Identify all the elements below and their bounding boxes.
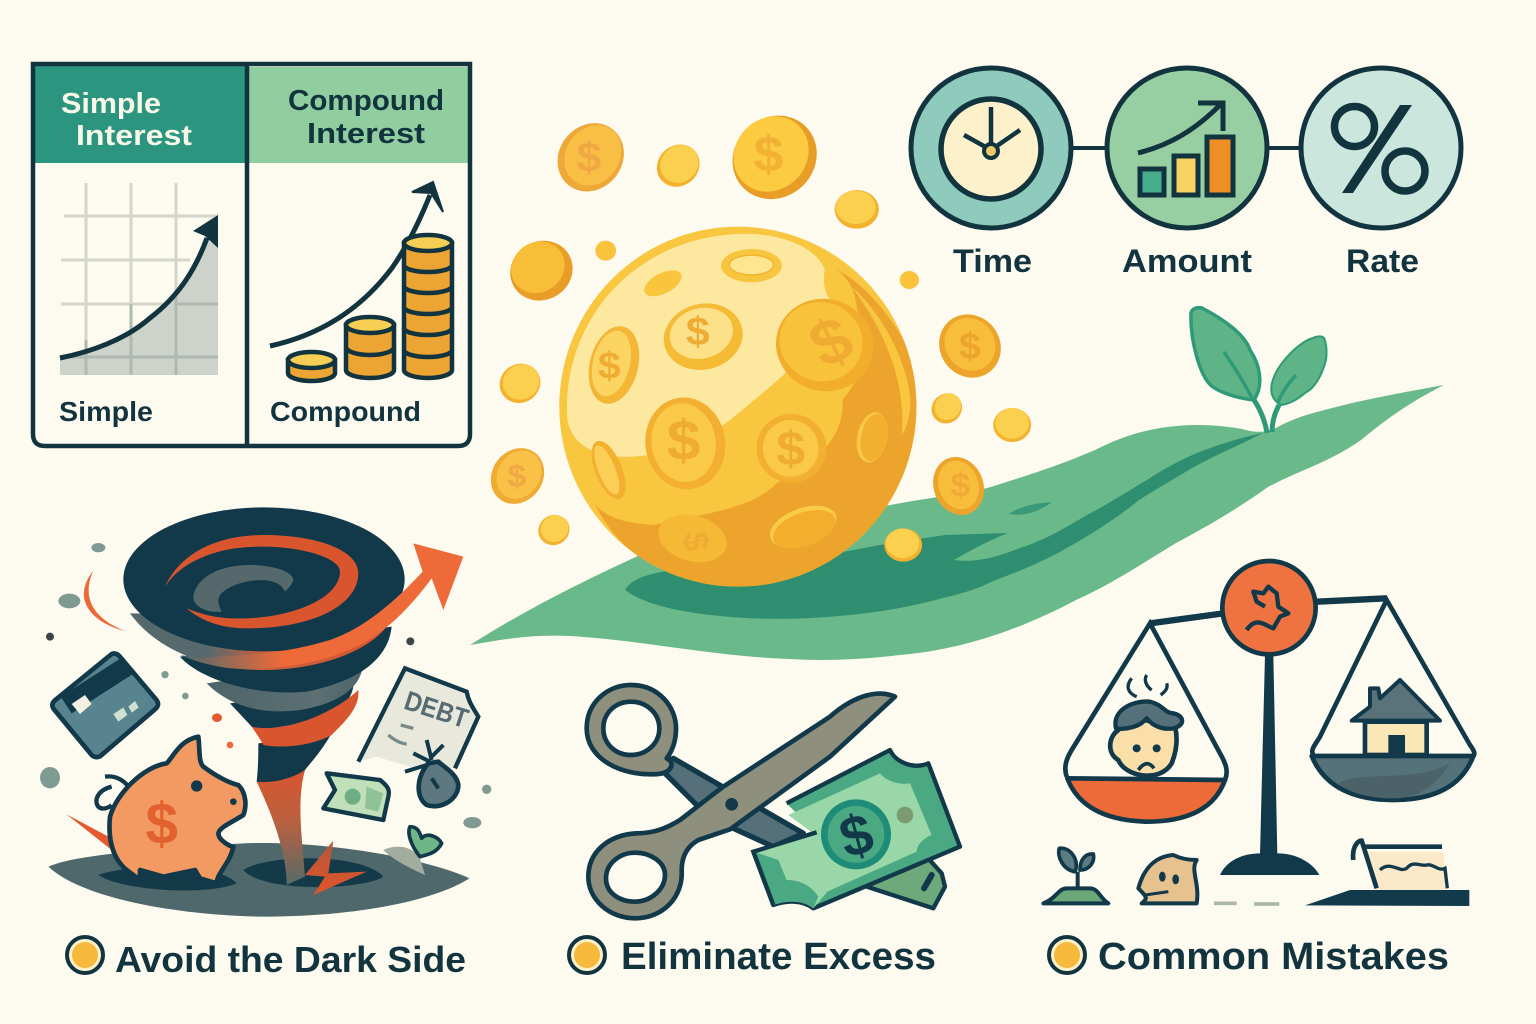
- hill small shadow: [1009, 502, 1052, 515]
- scissors main blade and bottom handle: [588, 694, 895, 918]
- chart: simple growth: [60, 183, 218, 375]
- ball shadow: [594, 270, 923, 593]
- icon: percent: [1301, 68, 1461, 228]
- icon: flying banknote: [323, 773, 389, 820]
- scale post and beam: [1150, 598, 1387, 875]
- illustration: green hill: [470, 385, 1444, 660]
- tornado funnel: [123, 507, 405, 885]
- ball coins: [581, 249, 892, 570]
- icon: debt document: [358, 668, 478, 768]
- panel frame: [33, 64, 470, 446]
- icon: clock: [911, 68, 1071, 228]
- icon: money bag: [405, 740, 458, 806]
- heading: simple interest: Interest: [76, 120, 192, 152]
- label: amount: Amount: [1122, 243, 1252, 279]
- illustration: balance scale of mistakes: [1043, 561, 1474, 906]
- icon: credit card: [52, 653, 158, 757]
- tornado spiral: [165, 535, 358, 628]
- dollar signs on flying coins: $: [950, 468, 970, 504]
- debris dots and swooshes: [40, 543, 491, 828]
- scissors top handle: [587, 685, 676, 774]
- heading: compound interest: Compound: [288, 85, 444, 117]
- dollar signs on flying coins: $: [577, 135, 601, 181]
- caption: avoid the dark side: Avoid the Dark Side: [115, 939, 466, 980]
- ball coin dollar signs: $: [686, 308, 710, 354]
- heading: compound interest: [249, 67, 468, 163]
- panel: simple vs compound interest: [33, 64, 470, 446]
- dollar medallion: $: [833, 802, 880, 871]
- coin stack small: [288, 352, 335, 381]
- heading: simple interest: [35, 65, 247, 163]
- small seedling: [1043, 848, 1108, 903]
- ball coin dollar signs: $: [776, 422, 805, 476]
- ball coin dollar signs: $: [598, 345, 621, 387]
- dollar signs on flying coins: $: [754, 126, 784, 182]
- front banknote: [753, 750, 960, 908]
- dollar signs on flying coins: $: [507, 458, 526, 493]
- ball coin dollar signs: $: [674, 529, 716, 554]
- chart: compound growth with coin stacks: [270, 182, 452, 381]
- front note flap over blade: [753, 833, 857, 908]
- label: compound: Compound: [270, 396, 421, 427]
- small face rock: [1138, 855, 1197, 903]
- collapsed sign on ground: [1305, 841, 1469, 906]
- dollar signs on flying coins: [507, 126, 981, 504]
- ball highlight: [567, 234, 837, 457]
- label: rate: Rate: [1346, 243, 1419, 279]
- red growth arrow: [180, 543, 463, 669]
- left pan with worried person: [1065, 623, 1227, 822]
- ground shadow: [48, 843, 469, 917]
- scissors dark blade: [658, 758, 803, 847]
- label: time: Time: [953, 243, 1032, 279]
- dollar medallion: [821, 799, 913, 871]
- icon: small plant: [383, 827, 442, 875]
- coin stack medium: [346, 317, 394, 378]
- icon: piggy bank: $: [145, 791, 178, 856]
- lightning crack: [305, 841, 367, 895]
- ball rim highlight: [851, 287, 910, 437]
- illustration: rolling coin snowball: [481, 102, 1031, 593]
- coin stack tall: [404, 235, 452, 378]
- caption: eliminate excess: Eliminate Excess: [621, 936, 936, 978]
- illustration: scissors cutting money: [587, 685, 960, 918]
- ball coin dollar signs: $: [667, 410, 700, 473]
- ball coin dollar signs: [598, 302, 864, 554]
- illustration: debt tornado: [40, 507, 491, 917]
- dashed ground line: [1214, 898, 1279, 909]
- dollar signs on flying coins: $: [959, 326, 981, 367]
- back banknote: [857, 857, 945, 908]
- icon: growing bars: [1107, 68, 1267, 228]
- heading: simple interest: Simple: [61, 88, 161, 120]
- panel: time amount rate factors: [911, 68, 1461, 279]
- heading: compound interest: Interest: [307, 118, 425, 150]
- label: simple: Simple: [59, 396, 153, 427]
- warning medallion: [1222, 561, 1316, 654]
- icon: piggy bank: [67, 737, 245, 883]
- caption: common mistakes: Common Mistakes: [1098, 936, 1449, 978]
- scissors pivot: [725, 798, 738, 811]
- icon: debt document: DEBT: [401, 685, 472, 734]
- flying coins around the ball: [481, 102, 1031, 562]
- hill shadow and streak: [625, 433, 1263, 619]
- icon: sprout: [1191, 308, 1327, 433]
- right pan with house: [1312, 600, 1474, 800]
- ball coin dollar signs: $: [798, 302, 864, 381]
